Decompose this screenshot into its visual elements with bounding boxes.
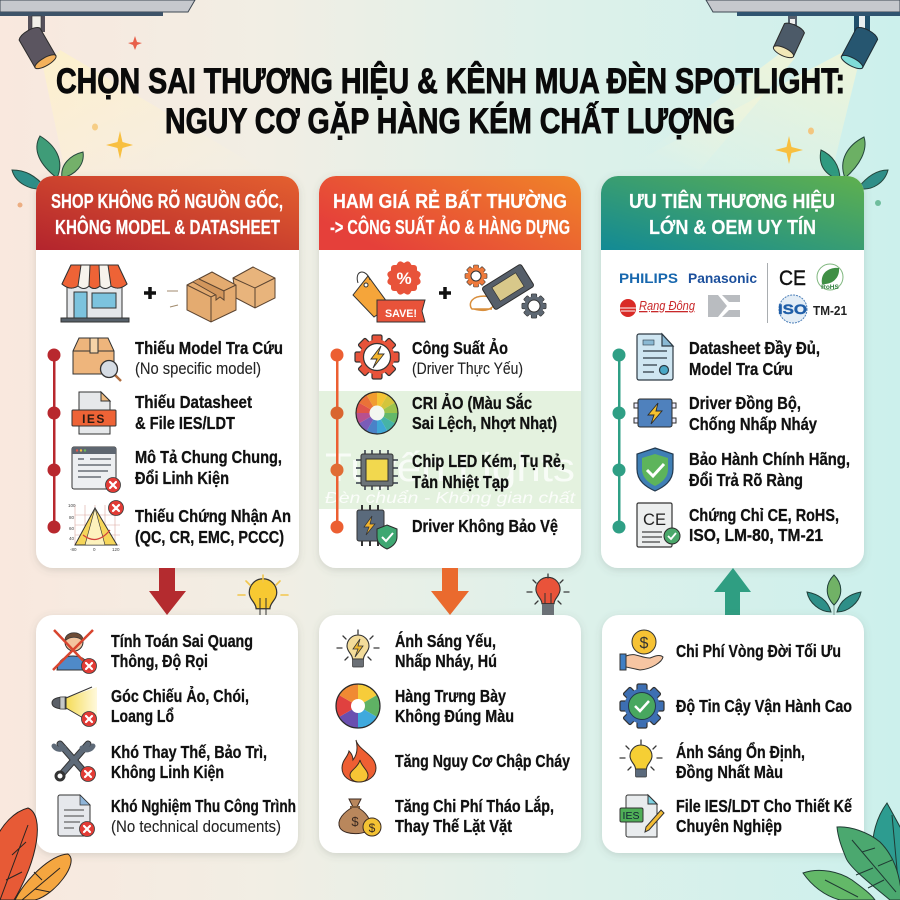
item: full datasheet: Datasheet Đầy Đủ,: [689, 338, 820, 358]
panel heading: brands: [601, 176, 864, 250]
icon: coin over hand: $: [640, 635, 649, 652]
panel heading: shop: [36, 176, 299, 250]
timeline: cheap: [330, 348, 344, 534]
item: certificates: ISO, LM-80, TM-21: [689, 525, 823, 545]
icon: datasheet document: [637, 334, 673, 380]
item: weak light: Nhấp Nháy, Hú: [395, 651, 497, 671]
panel heading: cheap: HAM GIÁ RẺ BẤT THƯỜNG: [333, 189, 567, 213]
icon: driver with shield: [357, 505, 397, 549]
icon: LED chip: [356, 450, 398, 490]
item: reliability: [620, 684, 852, 728]
watermark band: Tuyến Lights: [325, 446, 575, 490]
item: weak light: Ánh Sáng Yếu,: [395, 630, 496, 651]
icon: money bag: [339, 799, 381, 836]
item: fake beam angle: Loang Lổ: [111, 706, 174, 726]
item: genuine warranty: Bảo Hành Chính Hãng,: [689, 449, 850, 469]
item: reliability: Độ Tin Cậy Vận Hành Cao: [676, 696, 852, 716]
icon: money bag: $: [369, 821, 376, 835]
leaves top left: [12, 136, 83, 189]
certification logos: [778, 264, 847, 323]
item: synchronized driver: Chống Nhấp Nháy: [689, 414, 817, 434]
item: IES files: File IES/LDT Cho Thiết Kế: [676, 796, 852, 816]
item: fake CRI: [356, 392, 557, 434]
icon: price tags: %: [396, 269, 412, 288]
icon: CE document: CE: [643, 510, 666, 529]
certification logos: RoHS: [821, 284, 840, 291]
item: full datasheet: [637, 334, 820, 380]
item: stable light: Ánh Sáng Ổn Định,: [676, 741, 805, 762]
item: fire risk: Tăng Nguy Cơ Chập Cháy: [395, 751, 570, 771]
icon: flame: [342, 740, 376, 782]
icon: blue driver box: [634, 399, 676, 427]
item: certificates: [637, 503, 839, 547]
item: display colours wrong: [336, 684, 514, 728]
panel: consequences of unclear shop: [36, 615, 298, 853]
icon: plus: [439, 287, 451, 299]
icon: IES file with pencil: IES: [623, 810, 639, 822]
item: missing certification: Thiếu Chứng Nhận An: [135, 506, 291, 526]
item: missing model: Thiếu Model Tra Cứu: [135, 338, 283, 358]
icon: box with magnifier: [73, 338, 121, 381]
icon: photometric chart: 100: [68, 503, 76, 508]
title: NGUY CƠ GẶP HÀNG KÉM CHẤT LƯỢNG: [165, 101, 735, 141]
icon: crossed wrenches: [54, 744, 96, 782]
item: missing model: (No specific model): [135, 360, 261, 378]
item: missing certification: (QC, CR, EMC, PCCC): [135, 527, 284, 547]
icon: money bag: $: [351, 814, 359, 829]
icon: gear with bolt: [355, 335, 399, 379]
item: stable light: Đồng Nhất Màu: [676, 762, 783, 782]
brand logos: Rạng Đông: [639, 298, 696, 313]
spotlight right outer: [840, 16, 879, 71]
divider: [767, 263, 768, 323]
item: IES files: [620, 795, 852, 837]
item: unprotected driver: [357, 505, 558, 549]
icon: photometric chart: 120: [112, 547, 120, 552]
item: poor LED chip: Tản Nhiệt Tạp: [412, 472, 509, 492]
icon: colour wheel: [356, 392, 398, 434]
certification logos: CE: [779, 267, 806, 290]
item: rising costs: Tăng Chi Phí Tháo Lắp,: [395, 795, 554, 816]
item: unprotected driver: Driver Không Bảo Vệ: [412, 516, 558, 536]
leaves top right: [820, 137, 888, 189]
icon: crossed-out person: [53, 630, 96, 674]
item: poor LED chip: Chip LED Kém, Tụ Rẻ,: [412, 451, 565, 471]
icon: IES file: [72, 392, 116, 434]
brand logos: [619, 270, 757, 317]
panel: consequences of cheap price: [319, 615, 581, 853]
icon: six-colour wheel: [336, 684, 380, 728]
item: hard acceptance: (No technical documents): [111, 818, 281, 836]
icon: coin over hand: [620, 630, 663, 670]
light beams: [43, 50, 858, 190]
item: fake power: [355, 335, 523, 379]
certification logos: TM-21: [813, 303, 847, 318]
spotlight left: [17, 16, 58, 71]
panel heading: brands: LỚN & OEM UY TÍN: [649, 215, 816, 239]
item: display colours wrong: Không Đúng Màu: [395, 706, 514, 726]
item: lifecycle cost: Chi Phí Vòng Đời Tối Ưu: [676, 641, 841, 661]
item: rising costs: [339, 795, 554, 836]
timeline: shop: [48, 348, 60, 534]
item: fake power: (Driver Thực Yếu): [412, 360, 523, 378]
watermark band: [319, 391, 581, 509]
item: display colours wrong: Hàng Trưng Bày: [395, 686, 506, 706]
icon: plus: [144, 287, 156, 299]
panel heading: brands: ƯU TIÊN THƯƠNG HIỆU: [629, 189, 835, 213]
panel: unusually cheap price: [319, 176, 581, 568]
item: genuine warranty: Đổi Trả Rõ Ràng: [689, 470, 803, 490]
spotlight right inner: [772, 16, 806, 60]
panel heading: shop: KHÔNG MODEL & DATASHEET: [55, 215, 280, 239]
panel: benefits of trusted brands: [602, 615, 864, 853]
panel heading: shop: SHOP KHÔNG RÕ NGUỒN GỐC,: [51, 189, 283, 213]
item: missing datasheet: Thiếu Datasheet: [135, 392, 252, 412]
sparkles and dots: [18, 36, 881, 208]
item: genuine warranty: [637, 448, 850, 491]
icon: decorative red bulb: [527, 574, 569, 615]
icon: photometric chart: [68, 500, 124, 552]
item: fire risk: [342, 740, 570, 782]
timeline: brands: [612, 348, 626, 534]
icon: photometric chart: 80: [69, 515, 75, 520]
item: fake beam angle: [52, 685, 249, 726]
title: [56, 61, 845, 141]
icon: decorative yellow bulb: [238, 575, 288, 615]
item: wrong calculation: [53, 630, 253, 674]
icon: document with error: [58, 795, 94, 836]
icon: IES file: IES: [82, 412, 106, 426]
icon: browser window with error: [72, 447, 120, 492]
brand logos: Panasonic: [688, 270, 757, 286]
icon: price tags: [353, 260, 425, 322]
panel: shop without clear origin: [36, 176, 299, 568]
leaves bottom right: [803, 803, 900, 900]
item: lifecycle cost: [620, 630, 841, 670]
item: generic description: [72, 447, 282, 492]
ceiling track right: [706, 0, 900, 16]
item: wrong calculation: Tính Toán Sai Quang: [111, 631, 253, 651]
arrow: shop down to risks: [149, 568, 186, 615]
icon: photometric chart: -80: [70, 547, 77, 552]
icon: gear with check: [620, 684, 664, 728]
item: fake CRI: Sai Lệch, Nhợt Nhạt): [412, 413, 557, 433]
watermark band: Đèn chuẩn - Không gian chất: [325, 489, 576, 507]
item: certificates: Chứng Chỉ CE, RoHS,: [689, 505, 839, 525]
icon: yellow bulb: [620, 740, 662, 777]
item: hard to replace: Không Linh Kiện: [111, 762, 224, 782]
icon: photometric chart: 40: [69, 536, 75, 541]
icon: CE document: [637, 503, 680, 547]
icon: spotlight beam: [52, 687, 97, 726]
item: synchronized driver: Driver Đồng Bộ,: [689, 393, 801, 413]
icon: check shield: [637, 448, 673, 491]
icon: flickering bulb: [337, 630, 379, 667]
item: fake beam angle: Góc Chiếu Ảo, Chói,: [111, 685, 249, 706]
item: missing certification: [68, 500, 291, 552]
item: hard acceptance: [58, 795, 296, 836]
icon: photometric chart: 60: [69, 526, 75, 531]
item: generic description: Đổi Linh Kiện: [135, 468, 229, 488]
icon: cheap driver with gears: [465, 264, 546, 318]
icon: decorative sprout: [807, 575, 861, 617]
item: wrong calculation: Thông, Độ Rọi: [111, 651, 208, 671]
item: fake power: Công Suất Ảo: [412, 337, 508, 358]
arrow: benefits up to brands: [714, 568, 751, 615]
item: rising costs: Thay Thế Lặt Vặt: [395, 816, 512, 836]
icon: price tags: SAVE!: [385, 308, 417, 320]
item: hard to replace: Khó Thay Thế, Bảo Trì,: [111, 742, 267, 762]
item: poor LED chip: [356, 450, 565, 492]
item: missing datasheet: [72, 392, 252, 434]
certification logos: ISO: [778, 301, 807, 317]
item: generic description: Mô Tả Chung Chung,: [135, 447, 282, 467]
item: missing model: [73, 338, 283, 381]
icon: IES file with pencil: [620, 795, 664, 837]
item: full datasheet: Model Tra Cứu: [689, 359, 793, 379]
item: synchronized driver: [634, 393, 817, 434]
ceiling track left: [0, 0, 195, 16]
item: hard acceptance: Khó Nghiệm Thu Công Trình: [111, 796, 296, 816]
panel heading: cheap: -> CÔNG SUẤT ẢO & HÀNG DỰNG: [330, 215, 570, 239]
icon: storefront: [61, 265, 129, 322]
item: missing datasheet: & File IES/LDT: [135, 413, 235, 433]
panel heading: cheap: [319, 176, 581, 250]
item: weak light: [337, 630, 497, 671]
item: IES files: Chuyên Nghiệp: [676, 816, 782, 836]
icon: cardboard boxes: [167, 267, 275, 322]
leaves bottom left: [0, 808, 71, 900]
item: fake CRI: CRI ẢO (Màu Sắc: [412, 392, 532, 413]
item: stable light: [620, 740, 805, 782]
icon: photometric chart: 0: [93, 547, 96, 552]
item: hard to replace: [54, 742, 267, 782]
panel: major brands and OEM: [601, 176, 864, 568]
arrow: cheap down to risks: [431, 568, 469, 615]
brand logos: PHILIPS: [619, 270, 678, 286]
